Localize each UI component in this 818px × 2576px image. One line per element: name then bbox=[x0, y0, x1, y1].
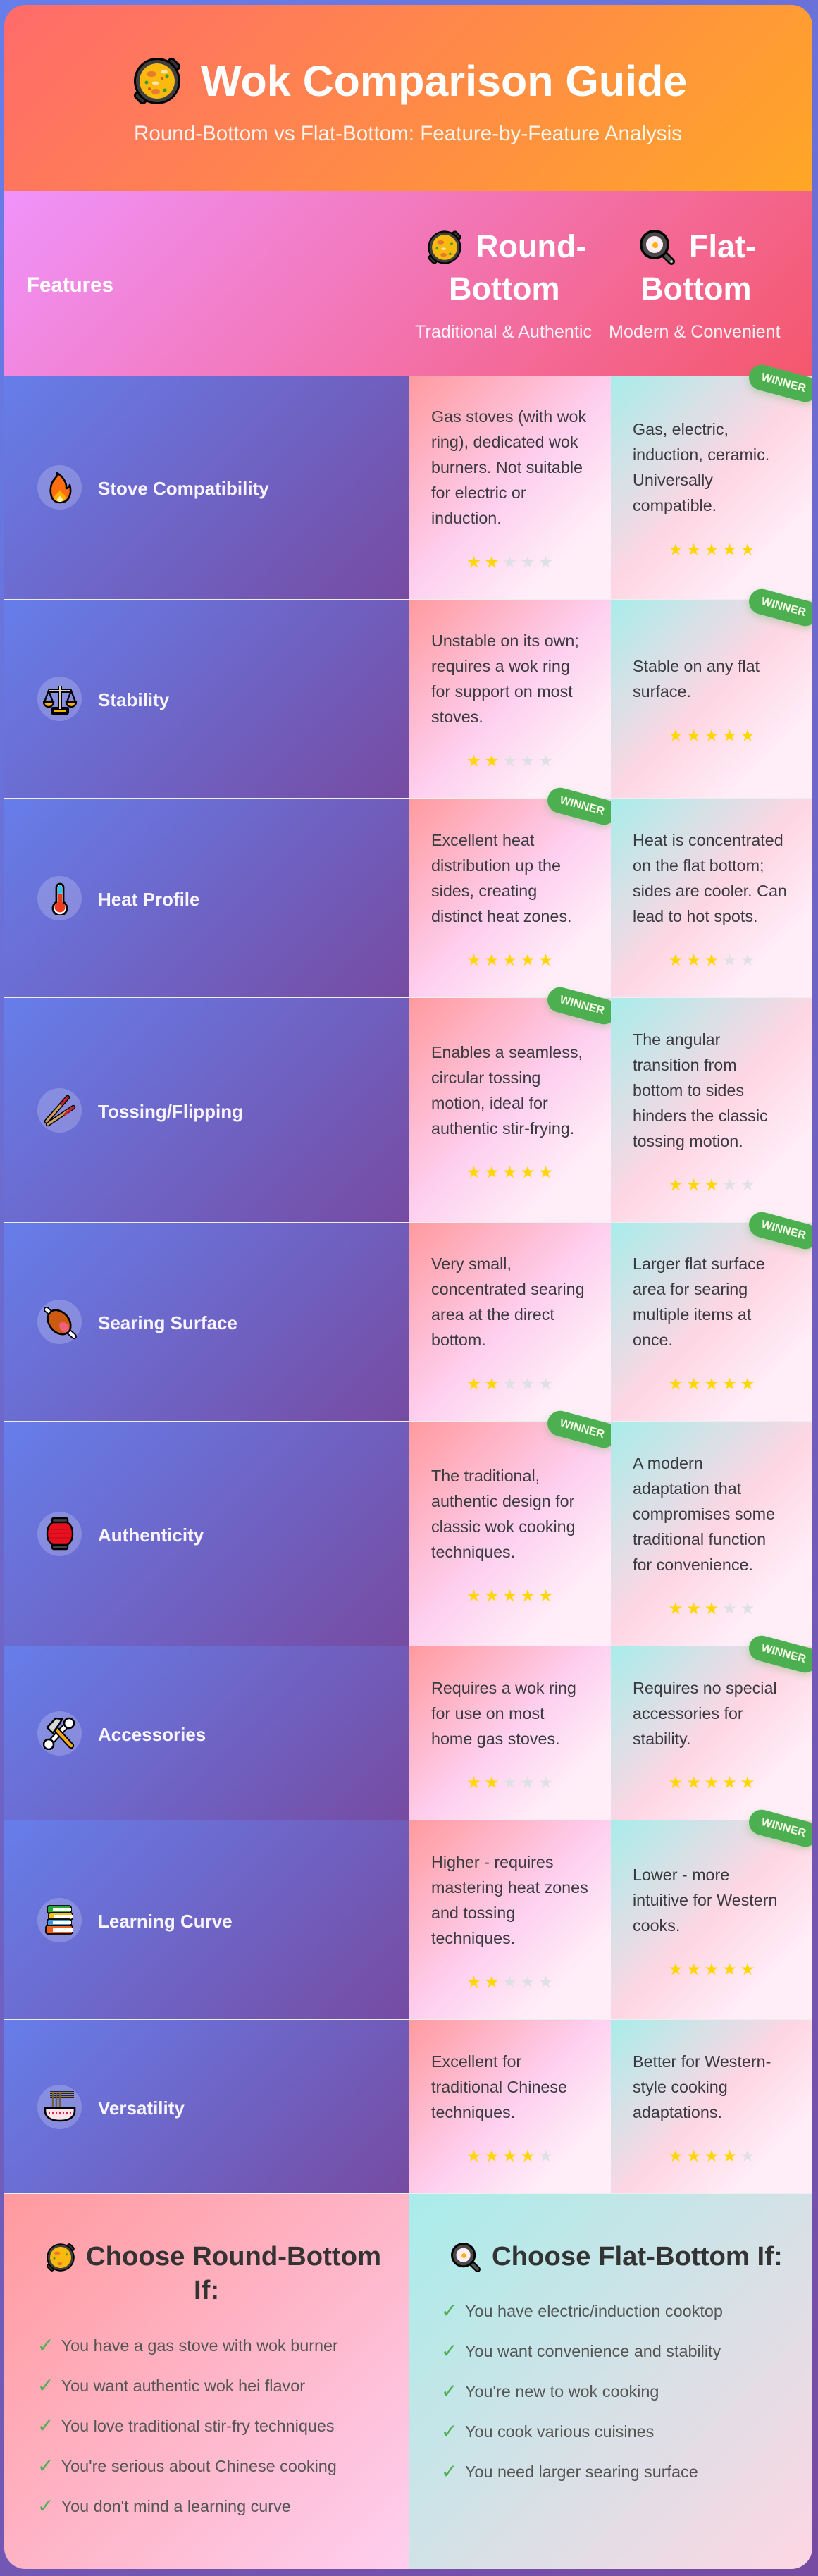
heading: Choose Round-Bottom bbox=[86, 2241, 381, 2272]
column subheading: round-bottom: Traditional & Authentic bbox=[415, 322, 592, 342]
panel: choose flat-bottom bbox=[409, 2194, 812, 2569]
description: and tossing bbox=[431, 1903, 515, 1921]
feature cell: versatility bbox=[4, 2020, 409, 2194]
description: techniques. bbox=[431, 2103, 515, 2121]
row: authenticity bbox=[4, 1422, 812, 1646]
column heading: round-bottom bbox=[449, 228, 586, 307]
icon: steaming noodle bowl bbox=[37, 2085, 82, 2128]
winner badge: WINNER bbox=[760, 1219, 807, 1242]
item: ✓ bbox=[441, 2299, 457, 2322]
description: multiple items at bbox=[633, 1305, 751, 1324]
icon: thermometer bbox=[37, 875, 82, 920]
winner badge: WINNER bbox=[559, 1417, 606, 1441]
description: burners. Not suitable bbox=[431, 458, 583, 476]
feature cell: heat profile bbox=[4, 799, 409, 998]
column subheading: flat-bottom: Modern & Convenient bbox=[609, 322, 781, 342]
item: You want convenience and stability bbox=[465, 2342, 721, 2360]
description: surface. bbox=[633, 682, 691, 701]
description: mastering heat zones bbox=[431, 1878, 588, 1896]
description: ring), dedicated wok bbox=[431, 433, 578, 451]
icon: shallow pan of food bbox=[134, 58, 180, 104]
rating: 5 of 5 stars bbox=[409, 1562, 611, 1607]
feature cell: stove compatibility bbox=[4, 376, 409, 600]
description: Heat is concentrated bbox=[633, 830, 783, 849]
winner badge: WINNER bbox=[760, 371, 807, 395]
description: The angular bbox=[633, 1030, 720, 1049]
description: Better for Western- bbox=[633, 2052, 771, 2071]
column heading: flat-bottom bbox=[640, 228, 756, 307]
description: traditional Chinese bbox=[431, 2078, 567, 2096]
round-bottom cell bbox=[409, 376, 611, 600]
column heading: round-bottom: Bottom bbox=[449, 271, 559, 307]
description bbox=[633, 1862, 812, 1938]
description: for use on most bbox=[431, 1704, 545, 1723]
feature name: Learning Curve bbox=[98, 1910, 233, 1931]
item: You want authentic wok hei flavor bbox=[61, 2377, 305, 2395]
description: Excellent for bbox=[431, 2052, 521, 2071]
description: sides, creating bbox=[431, 881, 537, 899]
item: ✓ bbox=[37, 2334, 54, 2357]
description: stoves. bbox=[431, 708, 483, 726]
description bbox=[431, 631, 579, 726]
row: heat profile bbox=[4, 787, 812, 998]
description: area at the direct bbox=[431, 1305, 554, 1324]
description: requires a wok ring bbox=[431, 657, 570, 675]
description: stability. bbox=[633, 1730, 690, 1748]
item: You cook various cuisines bbox=[465, 2422, 654, 2441]
feature cell: authenticity bbox=[4, 1422, 409, 1646]
description: authentic design for bbox=[431, 1491, 574, 1510]
rating: 2 of 5 stars bbox=[468, 556, 552, 568]
feature cell: searing surface bbox=[4, 1223, 409, 1422]
description: intuitive for Western bbox=[633, 1890, 777, 1909]
description bbox=[633, 1251, 812, 1352]
row: versatility bbox=[4, 2020, 812, 2194]
panel: choose round-bottom bbox=[4, 2194, 409, 2569]
feature name: Accessories bbox=[98, 1724, 206, 1745]
round-bottom cell bbox=[409, 799, 611, 998]
icon: shallow pan of food bbox=[428, 230, 461, 264]
item: ✓ bbox=[441, 2379, 457, 2403]
description: tossing motion. bbox=[633, 1132, 743, 1150]
description: techniques. bbox=[431, 1542, 515, 1560]
description: Requires no special bbox=[633, 1679, 777, 1697]
winner badge: WINNER bbox=[559, 994, 606, 1017]
icon: chopsticks bbox=[37, 1088, 82, 1132]
description: Unstable on its own; bbox=[431, 631, 579, 650]
rating: 5 of 5 stars bbox=[611, 1350, 812, 1395]
description: for convenience. bbox=[633, 1555, 753, 1573]
item: You're serious about Chinese cooking bbox=[61, 2457, 337, 2475]
description: Gas stoves (with wok bbox=[431, 407, 586, 426]
description: adaptation that bbox=[633, 1479, 741, 1497]
description bbox=[633, 827, 812, 929]
description: techniques. bbox=[431, 1928, 515, 1947]
description bbox=[633, 2048, 812, 2124]
description: for support on most bbox=[431, 682, 573, 701]
rating: 5 of 5 stars bbox=[468, 954, 552, 966]
round-bottom cell bbox=[409, 998, 611, 1223]
description: concentrated searing bbox=[431, 1280, 585, 1298]
table header bbox=[4, 191, 812, 376]
item: You're new to wok cooking bbox=[465, 2382, 659, 2401]
icon: shallow pan of food bbox=[46, 2243, 75, 2272]
row: stove compatibility bbox=[4, 364, 812, 600]
description: motion, ideal for bbox=[431, 1094, 548, 1112]
rating: 5 of 5 stars bbox=[611, 1935, 812, 1980]
description: Excellent heat bbox=[431, 830, 534, 849]
feature name: Authenticity bbox=[98, 1524, 204, 1545]
heading: If: bbox=[194, 2275, 219, 2305]
description: bottom. bbox=[431, 1331, 486, 1349]
flat-bottom cell bbox=[611, 1646, 812, 1820]
description: induction. bbox=[431, 509, 502, 527]
item bbox=[37, 2412, 335, 2440]
description: compatible. bbox=[633, 496, 717, 514]
checklist bbox=[37, 2331, 390, 2520]
description: The traditional, bbox=[431, 1466, 540, 1484]
checklist bbox=[441, 2297, 793, 2486]
row: searing surface bbox=[4, 1223, 812, 1422]
header banner bbox=[4, 5, 812, 191]
round-bottom cell bbox=[409, 1422, 611, 1646]
icon: fire bbox=[37, 465, 82, 510]
description bbox=[633, 657, 760, 701]
title: Wok Comparison Guide bbox=[201, 57, 687, 105]
description: Requires a wok ring bbox=[431, 1679, 576, 1697]
description: hinders the classic bbox=[633, 1107, 768, 1125]
flat-bottom cell bbox=[611, 998, 812, 1223]
row: tossing/flipping bbox=[4, 998, 812, 1223]
description bbox=[431, 1675, 611, 1751]
item: ✓ bbox=[441, 2420, 457, 2443]
description: accessories for bbox=[633, 1704, 743, 1723]
description: Stable on any flat bbox=[633, 657, 760, 675]
item bbox=[441, 2458, 698, 2486]
rating: 3 of 5 stars bbox=[611, 926, 812, 971]
item: ✓ bbox=[37, 2374, 54, 2397]
item: You have a gas stove with wok burner bbox=[61, 2336, 338, 2355]
description: on the flat bottom; bbox=[633, 856, 764, 874]
description: classic wok cooking bbox=[431, 1517, 576, 1535]
item bbox=[441, 2377, 659, 2405]
column heading: features: Features bbox=[27, 273, 113, 297]
feature cell: stability bbox=[4, 600, 409, 799]
item: ✓ bbox=[441, 2339, 457, 2362]
rating: 5 of 5 stars bbox=[409, 1139, 611, 1183]
item bbox=[37, 2452, 337, 2480]
feature name: Stove Compatibility bbox=[98, 478, 269, 499]
row: accessories bbox=[4, 1646, 812, 1820]
round-bottom cell bbox=[409, 1646, 611, 1820]
description bbox=[431, 1251, 611, 1352]
description: compromises some bbox=[633, 1504, 775, 1522]
description: induction, ceramic. bbox=[633, 445, 769, 464]
description: transition from bbox=[633, 1056, 737, 1074]
rating: 2 of 5 stars bbox=[409, 1749, 611, 1793]
feature name: Tossing/Flipping bbox=[98, 1101, 243, 1122]
description: distinct heat zones. bbox=[431, 906, 571, 925]
description bbox=[633, 420, 769, 514]
rating: 5 of 5 stars bbox=[669, 729, 754, 741]
description bbox=[431, 1463, 611, 1565]
rating: 3 of 5 stars bbox=[611, 1574, 812, 1620]
description bbox=[431, 1849, 611, 1951]
round-bottom cell bbox=[409, 600, 611, 799]
flat-bottom cell bbox=[611, 1223, 812, 1422]
column heading: flat-bottom: Bottom bbox=[640, 271, 751, 307]
description bbox=[633, 1450, 812, 1577]
description: sides are cooler. Can bbox=[633, 881, 787, 899]
feature name: Searing Surface bbox=[98, 1312, 237, 1333]
icon: balance scale bbox=[37, 677, 82, 721]
description: authentic stir-frying. bbox=[431, 1119, 574, 1138]
item: ✓ bbox=[37, 2494, 54, 2518]
item bbox=[441, 2417, 654, 2446]
description: traditional function bbox=[633, 1529, 766, 1548]
feature cell: accessories bbox=[4, 1646, 409, 1820]
item bbox=[441, 2337, 721, 2365]
feature cell: tossing/flipping bbox=[4, 998, 409, 1223]
round-bottom cell bbox=[409, 1820, 611, 2020]
icon: red lantern bbox=[37, 1511, 82, 1556]
description: A modern bbox=[633, 1453, 703, 1472]
feature cell: learning curve bbox=[4, 1820, 409, 2020]
rating: 2 of 5 stars bbox=[468, 755, 552, 767]
subtitle: Round-Bottom vs Flat-Bottom: Feature-by-Feature Analysis bbox=[134, 122, 682, 145]
description: Gas, electric, bbox=[633, 420, 729, 438]
description bbox=[431, 1039, 611, 1140]
rating: 3 of 5 stars bbox=[611, 1152, 812, 1195]
description: adaptations. bbox=[633, 2103, 722, 2121]
item bbox=[37, 2492, 291, 2520]
item: ✓ bbox=[37, 2414, 54, 2437]
item: You love traditional stir-fry techniques bbox=[61, 2417, 335, 2435]
item: ✓ bbox=[37, 2454, 54, 2477]
icon: meat on bone bbox=[37, 1300, 82, 1344]
description: lead to hot spots. bbox=[633, 906, 757, 925]
description: distribution up the bbox=[431, 856, 561, 874]
rating: 4 of 5 stars bbox=[409, 2123, 611, 2167]
round-bottom cell bbox=[409, 1223, 611, 1422]
winner badge: WINNER bbox=[760, 1816, 807, 1839]
feature name: Heat Profile bbox=[98, 888, 200, 909]
rating: 2 of 5 stars bbox=[409, 1948, 611, 1993]
flat-bottom cell bbox=[611, 2020, 812, 2194]
flat-bottom cell bbox=[611, 1820, 812, 2020]
rating: 5 of 5 stars bbox=[669, 543, 754, 555]
description: circular tossing bbox=[431, 1068, 540, 1087]
winner badge: WINNER bbox=[760, 1642, 807, 1665]
rating: 2 of 5 stars bbox=[409, 1350, 611, 1395]
description bbox=[633, 1026, 812, 1153]
description: for electric or bbox=[431, 483, 526, 502]
flat-bottom cell bbox=[611, 799, 812, 998]
description bbox=[633, 1675, 812, 1751]
description bbox=[431, 407, 586, 527]
description: Higher - requires bbox=[431, 1852, 554, 1871]
icon: books bbox=[37, 1897, 82, 1942]
item bbox=[37, 2372, 305, 2400]
feature name: Versatility bbox=[98, 2097, 185, 2119]
row: learning curve bbox=[4, 1820, 812, 2020]
item: You need larger searing surface bbox=[465, 2463, 698, 2481]
column heading: flat-bottom: Flat- bbox=[689, 228, 756, 264]
icon: hammer and wrench bbox=[37, 1711, 82, 1755]
icon: frying pan with egg bbox=[640, 230, 675, 265]
description: area for searing bbox=[633, 1280, 748, 1298]
winner badge: WINNER bbox=[760, 596, 807, 619]
description: cooks. bbox=[633, 1916, 680, 1934]
winner badge: WINNER bbox=[559, 794, 606, 818]
description: home gas stoves. bbox=[431, 1730, 560, 1748]
item bbox=[37, 2331, 338, 2360]
description: Very small, bbox=[431, 1255, 512, 1273]
item bbox=[441, 2297, 723, 2325]
description bbox=[431, 2048, 611, 2124]
row: stability bbox=[4, 588, 812, 799]
icon: frying pan with egg bbox=[451, 2243, 481, 2272]
description: Enables a seamless, bbox=[431, 1043, 583, 1061]
description: once. bbox=[633, 1331, 673, 1349]
flat-bottom cell bbox=[611, 376, 812, 600]
item: You don't mind a learning curve bbox=[61, 2497, 291, 2515]
item: ✓ bbox=[441, 2460, 457, 2483]
flat-bottom cell bbox=[611, 600, 812, 799]
description bbox=[431, 827, 611, 929]
description: Larger flat surface bbox=[633, 1255, 765, 1273]
rating: 5 of 5 stars bbox=[611, 1749, 812, 1793]
description: style cooking bbox=[633, 2078, 728, 2096]
description: bottom to sides bbox=[633, 1081, 744, 1099]
rating: 4 of 5 stars bbox=[611, 2123, 812, 2167]
description: Universally bbox=[633, 471, 713, 489]
round-bottom cell bbox=[409, 2020, 611, 2194]
heading bbox=[86, 2240, 381, 2307]
item: You have electric/induction cooktop bbox=[465, 2302, 723, 2320]
heading: Choose Flat-Bottom If: bbox=[492, 2241, 783, 2272]
feature name: Stability bbox=[98, 689, 169, 710]
column heading: round-bottom: Round- bbox=[476, 228, 586, 264]
description: Lower - more bbox=[633, 1865, 729, 1883]
flat-bottom cell bbox=[611, 1422, 812, 1646]
